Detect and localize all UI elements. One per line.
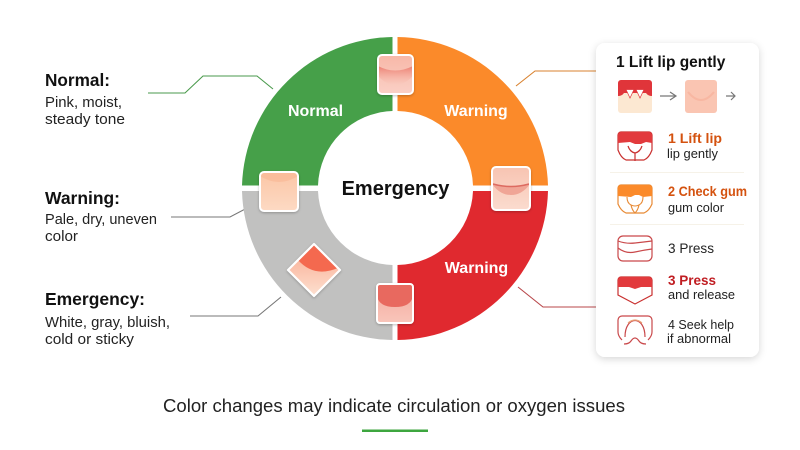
segment label: Warning orange: Warning <box>444 103 508 120</box>
label: Normal: Normal: <box>45 70 110 90</box>
segment: gray Emergency <box>242 191 392 340</box>
label: Emergency: Emergency: <box>45 289 145 309</box>
leader line: Emergency <box>190 297 281 316</box>
step text: 1 Lift lip: lip gently <box>667 146 719 161</box>
step text: 1 Lift lip <box>667 130 722 161</box>
segment label: Warning red: Warning <box>445 260 508 277</box>
caption: Color changes may indicate circulation or oxygen issues <box>163 395 625 416</box>
label: Normal: Pink, moist, <box>45 95 122 111</box>
step text: 2 Check gum: gum color <box>668 200 725 215</box>
leader line: red Warning <box>518 287 597 307</box>
step text: 3 Press and release: 3 Press <box>668 272 716 288</box>
segment: orange Warning <box>398 37 548 186</box>
icon: check gum <box>618 185 652 213</box>
label: Warning: Warning: <box>45 188 120 208</box>
tile: bottom gum swatch <box>377 284 413 323</box>
arrow <box>660 92 676 100</box>
step text: 3 Press and release <box>668 272 735 302</box>
divider <box>610 224 744 225</box>
step text: 1 Lift lip: 1 Lift lip <box>668 130 722 146</box>
tile: diamond gum swatch <box>288 244 340 296</box>
leader line: Warning <box>171 207 249 217</box>
tile: right gum swatch <box>492 167 530 210</box>
tile: top gum swatch <box>378 55 413 94</box>
step text: 4 Seek help <box>667 317 734 346</box>
segment: red Warning <box>398 191 548 340</box>
icon: lift lip <box>618 132 652 161</box>
label: Emergency: cold or sticky <box>45 332 135 348</box>
label: Normal: steady tone <box>45 112 125 128</box>
chart: donut ring <box>242 37 548 340</box>
label: Emergency: White, gray, bluish, <box>45 315 170 331</box>
label: Normal <box>45 70 125 128</box>
label: Warning: color <box>45 229 78 245</box>
label: Warning: Pale, dry, uneven <box>45 212 157 228</box>
icon: seek help <box>618 316 652 344</box>
leader line: orange Warning <box>516 71 597 86</box>
step text: 3 Press: 3 Press <box>668 241 714 256</box>
icon: lifted lip <box>618 80 652 113</box>
step text: 2 Check gum <box>668 184 747 215</box>
icon: gum swatch <box>685 80 717 113</box>
label: Emergency <box>45 289 170 348</box>
arrow <box>726 92 735 100</box>
step text: 2 Check gum: 2 Check gum <box>668 184 747 199</box>
tile: left gum swatch <box>260 172 298 211</box>
panel: left labels <box>45 70 170 348</box>
step text: 4 Seek help: 4 Seek help <box>668 317 734 332</box>
icon: press and release <box>618 277 652 304</box>
segment label: Normal: Normal <box>288 103 343 120</box>
segment: green Normal <box>242 37 392 186</box>
caption underline <box>362 430 428 432</box>
center label: Emergency <box>342 178 450 200</box>
label: Warning <box>45 188 157 245</box>
leader line: Normal <box>148 76 273 93</box>
icon: press outline <box>618 236 652 261</box>
card title: 1 Lift lip gently <box>616 54 726 71</box>
step text: 4 Seek help: if abnormal <box>667 331 731 346</box>
step text: 3 Press and release: and release <box>668 287 735 302</box>
panel: steps card <box>596 43 759 357</box>
divider <box>610 172 744 173</box>
